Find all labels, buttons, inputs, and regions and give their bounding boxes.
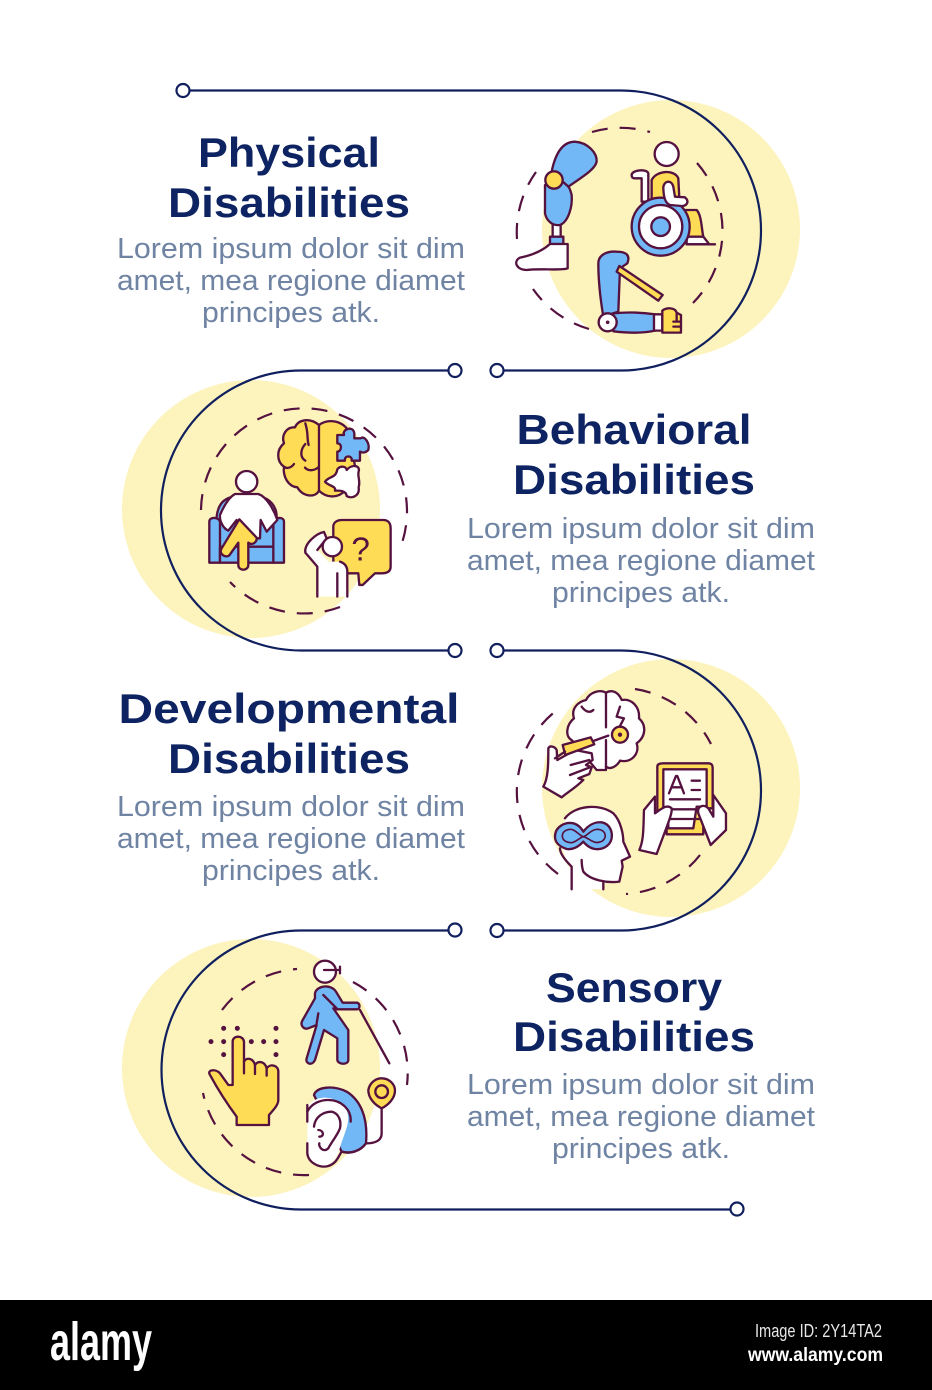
heading: sensory: Disabilities	[513, 1013, 755, 1060]
dashed ring: physical	[517, 128, 722, 329]
icon: person in armchair	[209, 471, 284, 570]
connector dot: physical end	[490, 364, 504, 377]
footer logo: alamy: alamy	[50, 1312, 152, 1372]
connector line: physical	[183, 90, 761, 370]
text block: developmental: principes atk.	[202, 855, 380, 887]
connector dot: developmental start	[490, 644, 504, 657]
icons: brain with puzzle, person in armchair, confused person	[209, 420, 391, 597]
heading: developmental: Developmental	[118, 685, 460, 732]
icon: brain with syringe and hand	[543, 691, 644, 797]
text block: sensory: amet, mea regione diamet	[467, 1101, 815, 1133]
panel: sensory disabilities	[122, 924, 815, 1216]
connector dot: developmental end	[490, 924, 504, 937]
connector dot: behavioral start	[448, 364, 462, 377]
text block: sensory: principes atk.	[552, 1133, 730, 1165]
icons: walker with cane, braille hand, hearing implant	[209, 961, 395, 1167]
heading: sensory: Sensory	[546, 964, 723, 1011]
text block: physical: Lorem ipsum dolor sit dim	[117, 233, 465, 265]
yellow circle: physical	[542, 100, 800, 358]
footer bar	[0, 1300, 932, 1390]
icon: brain with puzzle pieces	[278, 420, 369, 497]
heading: physical: Disabilities	[168, 179, 410, 226]
icon: blind person walking with cane	[302, 961, 389, 1064]
text block: developmental: Lorem ipsum dolor sit dim	[117, 791, 465, 823]
dashed ring: developmental	[517, 689, 711, 894]
icon: wheelchair user	[632, 142, 715, 256]
icons: brain injection, tablet, head with infinity	[543, 691, 726, 889]
text block: behavioral: amet, mea regione diamet	[467, 545, 815, 577]
footer image id: Image ID: 2Y14TA2	[755, 1321, 882, 1341]
dashed ring: behavioral	[201, 408, 407, 613]
icon: hand reading braille	[209, 1027, 278, 1125]
connector line: sensory	[161, 930, 737, 1210]
footer url: www.alamy.com	[747, 1345, 883, 1366]
connector dot: sensory end	[730, 1202, 744, 1216]
yellow circle: behavioral	[122, 380, 380, 638]
text block: behavioral: Lorem ipsum dolor sit dim	[467, 513, 815, 545]
icon: hands holding tablet	[639, 763, 726, 854]
connector dot: sensory start	[448, 924, 462, 936]
heading: physical: Physical	[198, 129, 380, 176]
icon: confused person with question bubble: ?	[351, 532, 370, 569]
heading: developmental: Disabilities	[168, 735, 410, 782]
connector line: behavioral	[161, 370, 455, 650]
text block: developmental: amet, mea regione diamet	[117, 823, 465, 855]
icon: confused person with question bubble	[305, 520, 391, 597]
connector dot: physical start	[176, 84, 190, 97]
heading: behavioral: Disabilities	[513, 456, 755, 503]
icon: prosthetic arm	[598, 252, 681, 333]
icon: ear with hearing implant	[307, 1078, 395, 1167]
panel: behavioral disabilities	[122, 364, 815, 657]
connector dot: behavioral end	[448, 644, 462, 657]
heading: behavioral: Behavioral	[516, 406, 752, 453]
panel: physical disabilities	[117, 84, 800, 377]
yellow circle: developmental	[542, 659, 800, 917]
connector line: developmental	[497, 650, 761, 930]
icon: prosthetic leg	[516, 142, 597, 270]
text block: physical: amet, mea regione diamet	[117, 265, 465, 297]
text block: sensory: Lorem ipsum dolor sit dim	[467, 1069, 815, 1101]
yellow circle: sensory	[122, 939, 380, 1197]
dashed ring: sensory	[203, 969, 408, 1175]
panel: developmental disabilities	[117, 644, 800, 937]
text block: physical: principes atk.	[202, 297, 380, 329]
text block: behavioral: principes atk.	[552, 577, 730, 609]
icon: head with infinity symbol	[555, 807, 630, 889]
icons: prosthetic leg, wheelchair user, prosthetic arm	[516, 142, 715, 333]
